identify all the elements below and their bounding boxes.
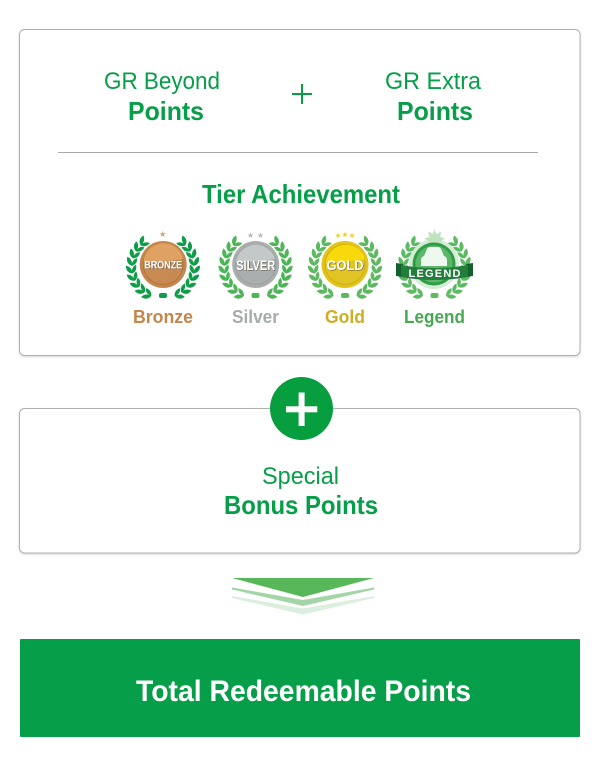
icon: thin plus bbox=[292, 84, 312, 104]
icon: silver medal: SILVER bbox=[236, 257, 275, 273]
icon: silver medal: ★ bbox=[257, 231, 264, 240]
label: Legend: Legend bbox=[404, 307, 465, 327]
icon: silver medal: ★ bbox=[247, 231, 254, 240]
label: GR Extra Points: GR Extra bbox=[385, 68, 482, 95]
icon: legend medal bbox=[396, 229, 473, 301]
arrow: layered chevrons pointing down bbox=[232, 578, 374, 614]
icon: gold medal bbox=[308, 230, 382, 301]
heading: Tier Achievement: Tier Achievement bbox=[202, 179, 400, 209]
label: GR Beyond Points: GR Beyond bbox=[104, 68, 220, 95]
icon: gold medal: ★ bbox=[349, 231, 356, 240]
label: Special Bonus Points: Special bbox=[262, 463, 339, 490]
label: Bronze: Bronze bbox=[133, 307, 193, 327]
banner: Total Redeemable Points bbox=[20, 639, 580, 737]
icon: bronze medal: BRONZE bbox=[144, 260, 182, 272]
icon: gold medal: GOLD bbox=[326, 257, 364, 273]
label: Silver: Silver bbox=[232, 307, 279, 327]
label: GR Extra Points: Points bbox=[397, 96, 473, 126]
icon: gold medal: ★ bbox=[342, 230, 349, 239]
icon: car bbox=[421, 247, 447, 266]
icon: bronze medal bbox=[126, 229, 200, 301]
icon: bronze medal: ★ bbox=[159, 229, 167, 239]
icon: gold medal: ★ bbox=[335, 231, 342, 240]
label: GR Beyond Points bbox=[104, 68, 220, 126]
icon: silver medal bbox=[218, 231, 293, 301]
label: GR Extra Points bbox=[385, 68, 482, 126]
label: Special Bonus Points bbox=[224, 463, 378, 520]
label: Gold: Gold bbox=[325, 307, 365, 327]
panel: special bonus points bbox=[20, 408, 580, 553]
panel: points and tiers bbox=[20, 30, 580, 356]
icon: green circle plus bbox=[270, 377, 333, 440]
label: Special Bonus Points: Bonus Points bbox=[224, 490, 378, 520]
icon: legend medal: LEGEND bbox=[408, 268, 461, 280]
banner: Total Redeemable Points: Total Redeemable Points bbox=[136, 675, 471, 708]
label: GR Beyond Points: Points bbox=[128, 96, 204, 126]
